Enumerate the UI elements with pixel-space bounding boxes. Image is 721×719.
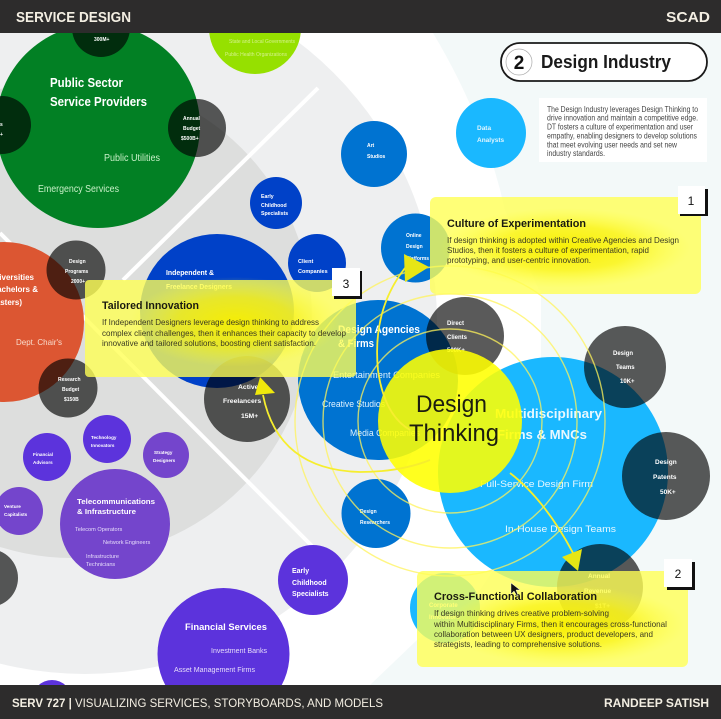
circle: design agencies and firms bbox=[298, 300, 458, 460]
tag 3 bbox=[332, 268, 362, 299]
concentric rings bbox=[295, 266, 605, 576]
circle: design patents: 50K+ bbox=[660, 489, 676, 496]
callout: cross-functional collaboration: Cross-Functional Collaboration bbox=[434, 591, 597, 603]
circle: annual revenue: Annual bbox=[588, 573, 610, 580]
intro text block: drive innovation and maintain a competitive edge. bbox=[547, 114, 698, 123]
circle: venture capitalists: Venture bbox=[4, 504, 21, 509]
circle: research budget: $150B bbox=[64, 397, 79, 403]
circle: government bbox=[209, 0, 301, 74]
circle: early childhood specialists purple: Specialists bbox=[292, 591, 329, 598]
circle: independent and freelance designers bbox=[140, 234, 294, 388]
callout: tailored innovation: Tailored Innovation bbox=[102, 300, 199, 312]
circle: design agencies and firms: & Firms bbox=[338, 338, 374, 350]
circle: corporate: Corporate bbox=[429, 603, 458, 609]
circle: research budget bbox=[38, 358, 98, 418]
circle: 300M+ stat: 300M+ bbox=[94, 37, 110, 43]
circle: direct clients: Clients bbox=[447, 335, 468, 341]
circle: financial advisors: Financial bbox=[33, 452, 53, 457]
circle: telecommunications and infrastructure bbox=[60, 469, 170, 579]
circle: design agencies and firms: Entertainment Companies bbox=[333, 370, 441, 380]
circle: early childhood specialists blue bbox=[250, 177, 302, 229]
circle: public sector service providers: Public Utilities bbox=[104, 153, 160, 164]
circle: financial services bbox=[158, 588, 290, 719]
icon: mouse cursor bbox=[511, 583, 520, 596]
tag 2: 2 bbox=[675, 567, 682, 581]
circle: design programs: Programs bbox=[65, 269, 89, 275]
circle: 300M+ stat bbox=[72, 0, 130, 57]
circle: design patents bbox=[622, 432, 710, 520]
callout: cross-functional collaboration: collaboration between UX designers, product developers, and bbox=[434, 629, 653, 639]
circle: government: Public Health Organizations bbox=[225, 52, 287, 58]
circle: financial services: Investment Banks bbox=[211, 648, 268, 655]
circle: financial services: Asset Management Firms bbox=[174, 667, 256, 674]
circle: strategy designers bbox=[143, 432, 189, 478]
circle: design teams: Teams bbox=[616, 365, 635, 371]
circle: active freelancers: 15M+ bbox=[241, 413, 258, 420]
circle: government: State and Local Governments bbox=[229, 39, 295, 45]
circle: financial advisors bbox=[23, 433, 71, 481]
circle: early childhood specialists purple: Early bbox=[292, 568, 309, 575]
circle: corporate: Innovators bbox=[429, 615, 460, 621]
footer bar: SERV 727 | VISUALIZING SERVICES, STORYBOARDS, AND MODELS bbox=[12, 696, 383, 710]
circle: early childhood specialists blue: Childhood bbox=[261, 203, 287, 209]
circle: strategy designers: Designers bbox=[153, 458, 176, 463]
footer bar: RANDEEP SATISH bbox=[604, 696, 709, 710]
header bar: SERVICE DESIGN bbox=[16, 10, 131, 26]
circle: telecommunications and infrastructure: Infrastructure bbox=[86, 554, 119, 560]
circle: data analysts: Data bbox=[477, 125, 491, 132]
callout: cross-functional collaboration: within Multidisciplinary Firms, then it encourages cross-functional bbox=[433, 619, 667, 629]
header bar bbox=[0, 0, 721, 33]
circle: direct clients: 500K+ bbox=[447, 348, 465, 354]
tag 1 bbox=[678, 186, 708, 216]
circle: design patents: Design bbox=[655, 459, 677, 466]
callout: cross-functional collaboration: strategists, leading to comprehensive solutions. bbox=[434, 639, 602, 649]
header bar: SCAD bbox=[666, 9, 710, 26]
circle: design researchers: Researchers bbox=[360, 520, 390, 526]
circle: multidisciplinary firms and MNCs: Full-Service Design Firm bbox=[480, 479, 593, 490]
circle: research budget: Budget bbox=[62, 387, 80, 393]
circle: telecommunications and infrastructure: Technicians bbox=[86, 562, 115, 568]
circle: technology innovators bbox=[83, 415, 131, 463]
tag 2 bbox=[664, 559, 695, 590]
circle: active freelancers: Freelancers bbox=[223, 398, 261, 405]
circle: financial services: Financial Services bbox=[185, 622, 267, 633]
circle: design teams: 10K+ bbox=[620, 379, 635, 385]
circle: corporate bbox=[410, 573, 480, 643]
circle: independent and freelance designers: Freelance Designers bbox=[166, 282, 232, 291]
circle: online design platforms bbox=[381, 214, 450, 282]
circle: art studios bbox=[341, 121, 407, 187]
circle: client companies bbox=[288, 234, 346, 292]
circle: design programs: Design bbox=[69, 259, 86, 265]
circle: online design platforms: Platforms bbox=[406, 256, 429, 262]
circle: design agencies and firms: Design Agencies bbox=[338, 324, 420, 336]
arrow 3 to active freelancers bbox=[255, 377, 430, 472]
design thinking core bbox=[378, 349, 522, 493]
circle: venture capitalists: Capitalists bbox=[4, 512, 28, 517]
callout: tailored innovation bbox=[85, 277, 356, 377]
intro text block: The Design Industry leverages Design Thinking to bbox=[547, 105, 698, 114]
callout: culture of experimentation: Culture of Experimentation bbox=[447, 218, 586, 230]
circle: design programs: 2000+ bbox=[71, 279, 85, 285]
circle: multidisciplinary firms and MNCs: Multidisciplinary bbox=[495, 406, 603, 421]
intro text block: empathy, enabling designers to develop solutions bbox=[547, 131, 697, 140]
circle: multidisciplinary firms and MNCs: Firms & MNCs bbox=[497, 427, 587, 442]
circle: annual revenue bbox=[557, 544, 643, 630]
circle: universities: Dept. Chair's bbox=[16, 337, 62, 347]
circle: financial advisors: Advisors bbox=[33, 460, 53, 465]
circle: public sector service providers: Emergency Services bbox=[38, 184, 119, 195]
circle: technology innovators: Innovators bbox=[91, 443, 115, 448]
footer bar bbox=[0, 685, 721, 719]
tag 3: 3 bbox=[343, 277, 350, 291]
circle: active freelancers: Active bbox=[238, 384, 259, 391]
circle: active freelancers bbox=[204, 356, 290, 442]
circle: multidisciplinary firms and MNCs: In-House Design Teams bbox=[505, 524, 616, 535]
intro text block: DT fosters a culture of experimentation and user bbox=[547, 123, 693, 132]
circle: bottom left stat bbox=[0, 549, 18, 607]
circle: annual budget: Budget bbox=[183, 126, 201, 132]
callout: culture of experimentation bbox=[430, 197, 701, 294]
circle: independent and freelance designers: Independent & bbox=[166, 268, 215, 277]
circle: art studios: Studios bbox=[367, 154, 386, 160]
circle: research budget: Research bbox=[58, 377, 81, 383]
design thinking core: Design bbox=[416, 391, 487, 418]
circle: design agencies and firms: Media Companies bbox=[350, 428, 420, 438]
circle: online design platforms: Design bbox=[406, 244, 423, 250]
circle: telecommunications and infrastructure: & Infrastructure bbox=[77, 507, 136, 516]
callout: cross-functional collaboration: If design thinking drives creative problem-solving bbox=[434, 608, 609, 618]
circle: universities bbox=[0, 242, 84, 402]
circle: design teams bbox=[584, 326, 666, 408]
circle: left stat: s bbox=[0, 122, 3, 128]
tag 1: 1 bbox=[688, 194, 695, 208]
callout: culture of experimentation: prototyping, and user-centric innovation. bbox=[447, 255, 591, 265]
circle: art studios: Art bbox=[367, 143, 375, 149]
circle: early childhood specialists purple bbox=[278, 545, 348, 615]
circle: design agencies and firms: Creative Studios bbox=[322, 399, 385, 409]
circle: direct clients bbox=[426, 297, 504, 375]
circle: early childhood specialists purple: Childhood bbox=[292, 580, 327, 587]
callout: tailored innovation: innovative and tailored solutions, boosting client satisfaction. bbox=[102, 338, 316, 348]
circle: direct clients: Direct bbox=[447, 321, 464, 327]
intro text block: industry standards. bbox=[547, 149, 605, 158]
circle: strategy designers: Strategy bbox=[154, 450, 173, 455]
circle: technology innovators: Technology bbox=[91, 435, 117, 440]
circle: multidisciplinary firms and MNCs bbox=[438, 357, 668, 587]
callout: culture of experimentation: If design thinking is adopted within Creative Agencies and Design bbox=[447, 235, 679, 245]
circle: annual budget bbox=[168, 99, 226, 157]
arrow 2 to annual revenue bbox=[510, 473, 582, 571]
circle: small purple bottom bbox=[32, 680, 72, 719]
intro text block: that meet evolving user needs and set new bbox=[547, 140, 677, 149]
circle: early childhood specialists blue: Specialists bbox=[261, 211, 288, 217]
circle: venture capitalists bbox=[0, 487, 43, 535]
circle: design patents: Patents bbox=[653, 474, 677, 481]
circle: client companies: Client bbox=[298, 259, 313, 265]
callout: cross-functional collaboration bbox=[417, 571, 688, 667]
circle: telecommunications and infrastructure: Telecom Operators bbox=[75, 527, 122, 533]
circle: client companies: Companies bbox=[298, 269, 328, 275]
circle: early childhood specialists blue: Early bbox=[261, 194, 274, 200]
section title pill: 2 bbox=[514, 53, 524, 74]
circle: data analysts bbox=[456, 98, 526, 168]
circle: annual budget: $500B+ bbox=[181, 136, 199, 142]
arrow 1 to online platforms bbox=[377, 254, 429, 430]
circle: public sector service providers bbox=[0, 24, 200, 228]
callout: culture of experimentation: Studios, then it fosters a culture of experimentation, rapid bbox=[447, 245, 649, 255]
circle: design programs bbox=[46, 240, 106, 300]
circle: left stat bbox=[0, 96, 31, 154]
circle: left stat: + bbox=[0, 132, 3, 138]
circle: annual revenue: Revenue bbox=[584, 588, 611, 595]
circle: annual budget: Annual bbox=[183, 116, 201, 122]
callout: tailored innovation: If Independent Designers leverage design thinking to address bbox=[102, 317, 319, 327]
section title pill bbox=[501, 43, 707, 81]
circle: public sector service providers: Public Sector bbox=[50, 76, 123, 90]
circle: telecommunications and infrastructure: Telecommunications bbox=[77, 497, 155, 506]
circle: design teams: Design bbox=[613, 351, 633, 357]
circle: data analysts: Analysts bbox=[477, 137, 504, 144]
design thinking core: Thinking bbox=[409, 420, 499, 447]
circle: design researchers: Design bbox=[360, 509, 377, 515]
circle: design researchers bbox=[342, 479, 410, 548]
circle: online design platforms: Online bbox=[406, 233, 422, 239]
callout: tailored innovation: complex client challenges, then it enhances their capacity to develop bbox=[102, 328, 346, 338]
circle: telecommunications and infrastructure: Network Engineers bbox=[103, 540, 150, 546]
circle: public sector service providers: Service Providers bbox=[50, 95, 147, 109]
section title pill: Design Industry bbox=[541, 51, 672, 72]
circle: annual revenue: $1T+ bbox=[595, 603, 610, 610]
intro text block bbox=[539, 98, 707, 162]
